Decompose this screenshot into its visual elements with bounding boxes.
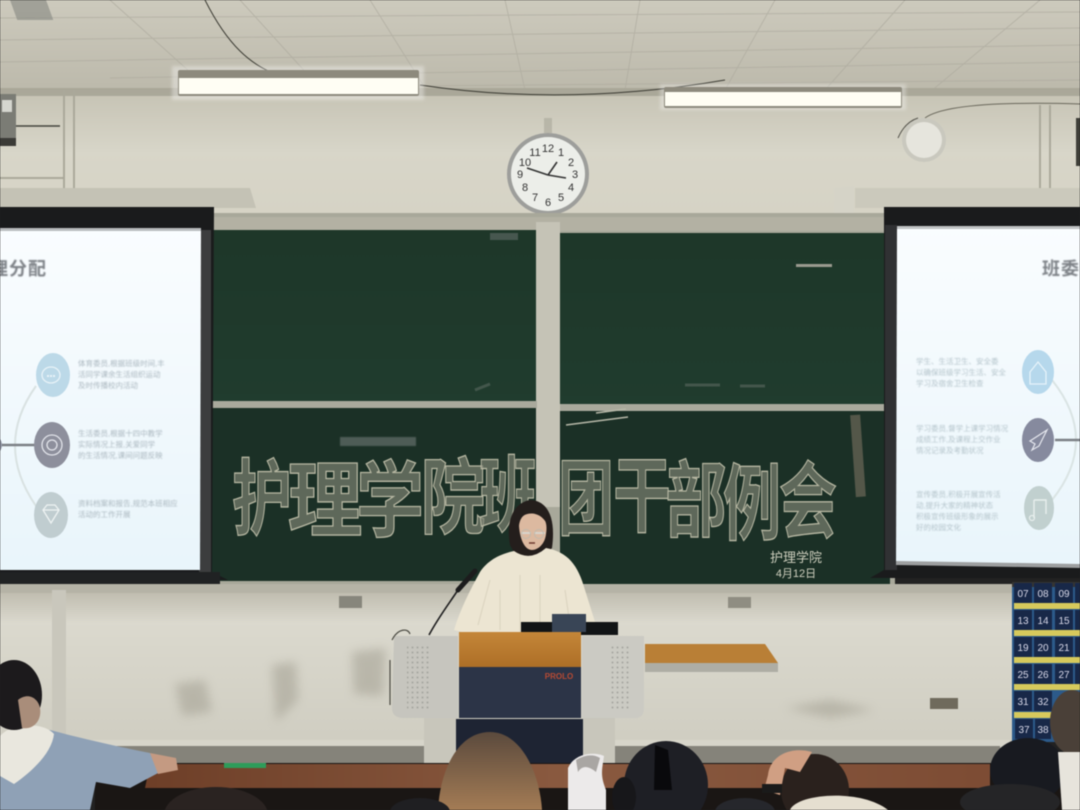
slide text blocks: 学习及宿舍卫生检查 — [916, 378, 984, 388]
slide text blocks: 实际情况上报,关爱同学 — [78, 439, 156, 449]
slide connector — [1052, 380, 1076, 500]
audience: white bag — [568, 754, 606, 810]
slide text blocks: 学生、生活卫生、安全委 — [916, 356, 999, 366]
slide text blocks: 活动的工作开展 — [78, 509, 131, 519]
wall clock: 2 — [568, 157, 574, 169]
right projector screen — [870, 207, 1080, 578]
chalk title — [232, 451, 837, 552]
wall clock: 12 — [542, 143, 554, 155]
chalk signature: 4月12日 — [776, 568, 816, 580]
wall clock: 1 — [558, 147, 564, 159]
chalk title: 学 — [356, 456, 424, 549]
pocket chart: 15 — [1058, 616, 1070, 627]
side shelf — [645, 644, 778, 672]
hair back — [509, 500, 553, 556]
audience: front head bottom left — [164, 787, 268, 810]
wall clock: 11 — [529, 147, 541, 159]
icon: chat bubble — [36, 353, 70, 397]
wall clock: 5 — [558, 192, 564, 204]
chalk title: 班 — [479, 451, 537, 544]
pocket chart: 19 — [1017, 643, 1029, 654]
chalk title: 会 — [779, 457, 837, 550]
wall clock: 10 — [519, 157, 531, 169]
audience: student left — [0, 660, 178, 810]
pocket chart: 20 — [1037, 643, 1049, 654]
slide text blocks: 活同学课余生活组织运动 — [78, 369, 161, 379]
icon: music note — [1024, 486, 1054, 530]
upper wall — [0, 0, 1080, 218]
audience: student with hair clip — [612, 741, 775, 810]
wall clock: 9 — [517, 169, 523, 181]
wall clock: 6 — [545, 197, 551, 209]
pocket chart: 26 — [1037, 670, 1049, 681]
wall clock: 4 — [568, 182, 574, 194]
slide text blocks: 的生活情况,课间问题反映 — [78, 450, 163, 460]
chalk signature: 护理学院 — [770, 550, 822, 565]
slide text blocks — [78, 358, 178, 519]
wall clock: 3 — [572, 169, 578, 181]
pocket chart: 38 — [1037, 725, 1049, 736]
slide text blocks: 好的校园文化 — [916, 522, 961, 532]
wall clock: 7 — [532, 192, 538, 204]
slide text blocks: 学习委员,督学上课学习情况 — [916, 423, 1009, 433]
slide text blocks: 资料档案和报告,规范本班相应 — [78, 498, 178, 508]
slide text blocks: 以确保班级学习生活、安全 — [916, 367, 1006, 377]
pocket chart: 27 — [1058, 670, 1070, 681]
chalk title: 团 — [558, 453, 614, 546]
face — [519, 513, 546, 550]
left projector screen — [0, 207, 228, 584]
chalk title: 院 — [421, 452, 485, 545]
lower wall — [0, 584, 1018, 764]
slide text blocks: 情况记录及考勤状况 — [916, 445, 984, 455]
pocket chart: 21 — [1058, 643, 1070, 654]
slide text blocks: 及时传播校内活动 — [78, 380, 138, 390]
speaker at lectern — [454, 500, 595, 634]
chalk title: 护 — [232, 455, 292, 546]
pocket chart: 32 — [1037, 697, 1049, 708]
audience: long-haired student — [390, 732, 542, 810]
ceiling — [0, 0, 1080, 92]
slide text blocks: 成绩工作,及课程上交作业 — [916, 434, 1001, 444]
wall clock: 8 — [522, 182, 528, 194]
pocket chart: 37 — [1018, 725, 1030, 736]
blackboard: upper left — [207, 230, 537, 401]
audience: student with hand on head — [762, 750, 888, 810]
wall speaker disc — [898, 118, 946, 162]
lectern: PROLO — [545, 672, 573, 681]
pocket chart — [1012, 582, 1080, 742]
microphone — [429, 571, 475, 635]
slide text blocks: 体育委员,根据班级时间,丰 — [78, 358, 165, 368]
blackboard frame — [205, 213, 895, 589]
pocket chart: 25 — [1017, 670, 1029, 681]
lectern — [390, 630, 644, 765]
blackboard: lower right — [560, 410, 890, 584]
audience: right-hand students — [960, 690, 1080, 810]
pocket chart: 13 — [1017, 616, 1029, 627]
blackboard rails — [205, 222, 890, 507]
slide heading: 班委 — [1042, 259, 1080, 279]
chalk title: 干 — [613, 451, 671, 544]
icon: paper plane — [1022, 418, 1054, 462]
wall clock — [507, 118, 589, 215]
pocket chart: 14 — [1037, 616, 1049, 627]
ceiling lights — [172, 66, 906, 110]
slide text blocks: 积极宣传班级形象的展示 — [916, 511, 999, 521]
pocket chart: 31 — [1017, 697, 1029, 708]
icon: house — [1022, 350, 1054, 394]
pocket chart: 07 — [1017, 589, 1029, 600]
slide text blocks: 生活委员,根据十四中教学 — [78, 428, 163, 438]
slide text blocks: 动,提升大家的精神状态 — [916, 500, 994, 510]
blackboard: upper right — [560, 233, 890, 404]
laptop on lectern — [521, 614, 618, 635]
slide connector — [15, 386, 36, 506]
slide text blocks — [916, 356, 1009, 532]
blackboard: lower left — [207, 408, 537, 581]
icon: diamond — [34, 492, 68, 538]
icon: life ring — [34, 422, 70, 468]
pocket chart: 09 — [1058, 589, 1070, 600]
ledges above screens — [0, 186, 1080, 220]
pocket chart: 08 — [1037, 589, 1049, 600]
chalk title: 部 — [665, 456, 727, 548]
chalk title: 理 — [288, 455, 362, 548]
chalk signature — [770, 550, 822, 580]
blouse — [454, 548, 595, 634]
chalk title: 例 — [723, 459, 781, 552]
slide text blocks: 宣传委员,积极开展宣传活 — [916, 489, 1001, 499]
desk row — [95, 763, 1080, 810]
